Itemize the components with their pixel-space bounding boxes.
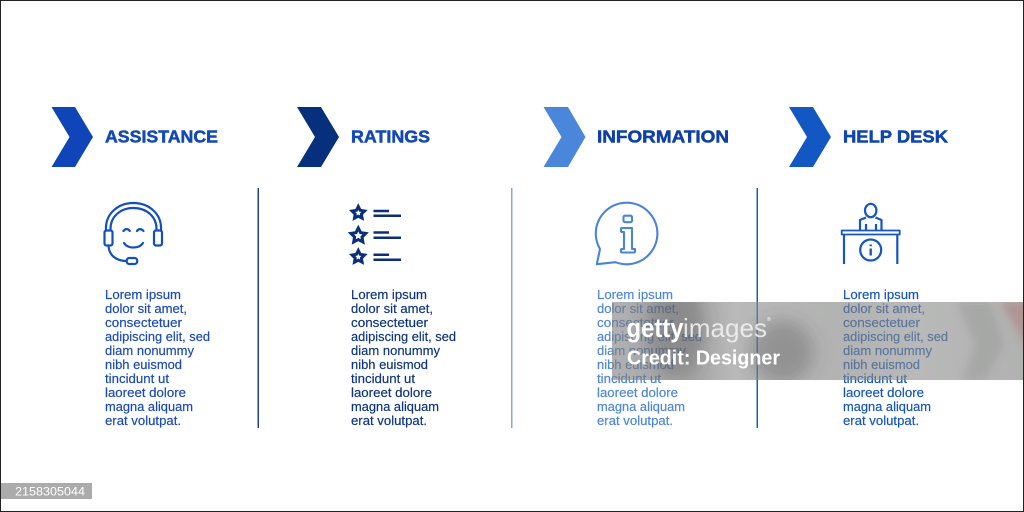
text block: assistance: diam nonummy bbox=[105, 343, 194, 358]
text block: ratings: Lorem ipsum bbox=[351, 287, 427, 302]
chevron: assistance bbox=[52, 107, 93, 167]
watermark: getty images credit: ® bbox=[767, 316, 771, 323]
chevron: information bbox=[544, 107, 586, 167]
heading: information: INFORMATION bbox=[597, 126, 729, 146]
text block: assistance: tincidunt ut bbox=[105, 371, 169, 386]
panel: information bbox=[544, 107, 729, 428]
heading: ratings: RATINGS bbox=[351, 126, 430, 146]
text block: assistance: adipiscing elit, sed bbox=[105, 329, 210, 344]
text block: assistance: erat volutpat. bbox=[105, 413, 181, 428]
text block: help desk: dolor sit amet, bbox=[843, 301, 925, 316]
chevron: ratings bbox=[297, 107, 339, 167]
chevron: help desk bbox=[789, 107, 831, 167]
text block: information: adipiscing elit, sed bbox=[597, 329, 702, 344]
text block: help desk: Lorem ipsum bbox=[843, 287, 919, 302]
heading: help desk: HELP DESK bbox=[843, 126, 948, 146]
icon: star rating list bbox=[351, 206, 401, 262]
panel: assistance bbox=[52, 107, 218, 428]
text block: help desk: nibh euismod bbox=[843, 357, 920, 372]
heading: assistance: ASSISTANCE bbox=[105, 126, 218, 146]
text block: ratings: laoreet dolore bbox=[351, 385, 432, 400]
watermark: getty images credit bbox=[612, 302, 1023, 380]
text block: ratings: dolor sit amet, bbox=[351, 301, 433, 316]
text block: information bbox=[597, 287, 702, 428]
text block: assistance: dolor sit amet, bbox=[105, 301, 187, 316]
text block: assistance: magna aliquam bbox=[105, 399, 193, 414]
text block: assistance: laoreet dolore bbox=[105, 385, 186, 400]
panel: ratings bbox=[297, 107, 456, 428]
text block: ratings: magna aliquam bbox=[351, 399, 439, 414]
text block: information: erat volutpat. bbox=[597, 413, 673, 428]
text block: help desk: magna aliquam bbox=[843, 399, 931, 414]
text block: information: laoreet dolore bbox=[597, 385, 678, 400]
text block: help desk: erat volutpat. bbox=[843, 413, 919, 428]
text block: help desk: consectetuer bbox=[843, 315, 921, 330]
text block: assistance bbox=[105, 287, 210, 428]
text block: ratings: diam nonummy bbox=[351, 343, 440, 358]
image id badge bbox=[1, 483, 92, 499]
text block: information: magna aliquam bbox=[597, 399, 685, 414]
image id badge: 2158305044 bbox=[15, 486, 86, 498]
text block: ratings: erat volutpat. bbox=[351, 413, 427, 428]
text block: ratings bbox=[351, 287, 456, 428]
panel: help desk bbox=[789, 107, 948, 428]
icon: person at help desk bbox=[842, 204, 900, 264]
text block: help desk: laoreet dolore bbox=[843, 385, 924, 400]
text block: assistance: Lorem ipsum bbox=[105, 287, 181, 302]
text block: help desk: tincidunt ut bbox=[843, 371, 907, 386]
text block: information: diam nonummy bbox=[597, 343, 686, 358]
watermark: getty images credit: getty bbox=[626, 313, 684, 343]
watermark: getty images credit: images bbox=[683, 313, 767, 343]
text block: help desk bbox=[843, 287, 948, 428]
text block: assistance: nibh euismod bbox=[105, 357, 182, 372]
text block: information: Lorem ipsum bbox=[597, 287, 673, 302]
watermark: getty images credit: Credit: Designer bbox=[627, 348, 780, 370]
text block: information: dolor sit amet, bbox=[597, 301, 679, 316]
text block: help desk: diam nonummy bbox=[843, 343, 932, 358]
text block: ratings: consectetuer bbox=[351, 315, 429, 330]
text block: information: tincidunt ut bbox=[597, 371, 661, 386]
text block: ratings: nibh euismod bbox=[351, 357, 428, 372]
text block: help desk: adipiscing elit, sed bbox=[843, 329, 948, 344]
text block: information: consectetuer bbox=[597, 315, 675, 330]
icon: headset with smile bbox=[104, 203, 162, 264]
icon: information speech bubble bbox=[596, 203, 657, 264]
text block: ratings: tincidunt ut bbox=[351, 371, 415, 386]
text block: assistance: consectetuer bbox=[105, 315, 183, 330]
text block: information: nibh euismod bbox=[597, 357, 674, 372]
text block: ratings: adipiscing elit, sed bbox=[351, 329, 456, 344]
